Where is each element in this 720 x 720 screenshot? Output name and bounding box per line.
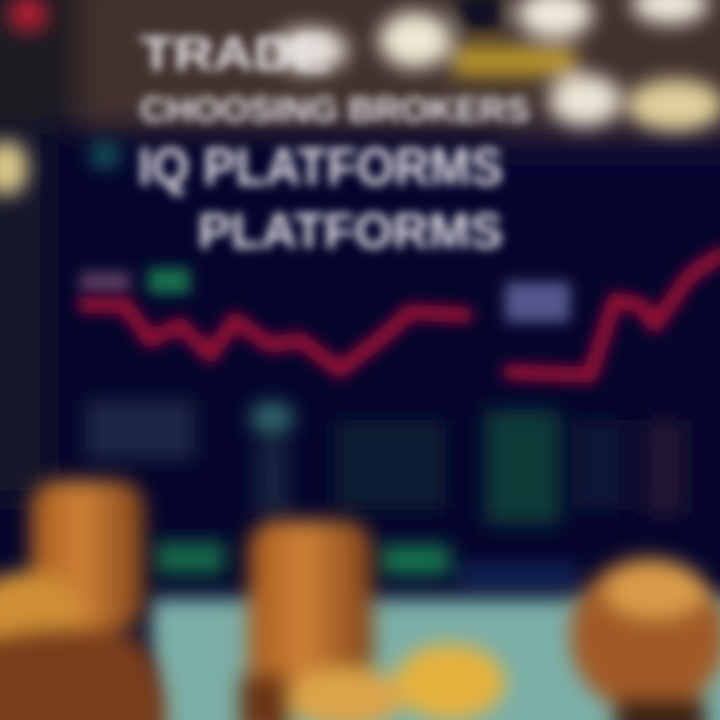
- title: IQ PLATFORMS: [138, 137, 503, 197]
- data table glow: [85, 400, 685, 525]
- title: PLATFORMS: [198, 203, 503, 259]
- title: TRADE: [140, 28, 330, 81]
- white and gold blobs at top: [0, 0, 720, 196]
- title: CHOOSING BROKERS: [140, 89, 530, 130]
- title: [138, 28, 530, 259]
- teal table surface: [150, 598, 720, 720]
- chart labels: [80, 268, 570, 322]
- green bars: [155, 542, 580, 587]
- top brown band: [0, 0, 720, 500]
- red price lines: [85, 255, 720, 375]
- coin stacks: [0, 480, 720, 720]
